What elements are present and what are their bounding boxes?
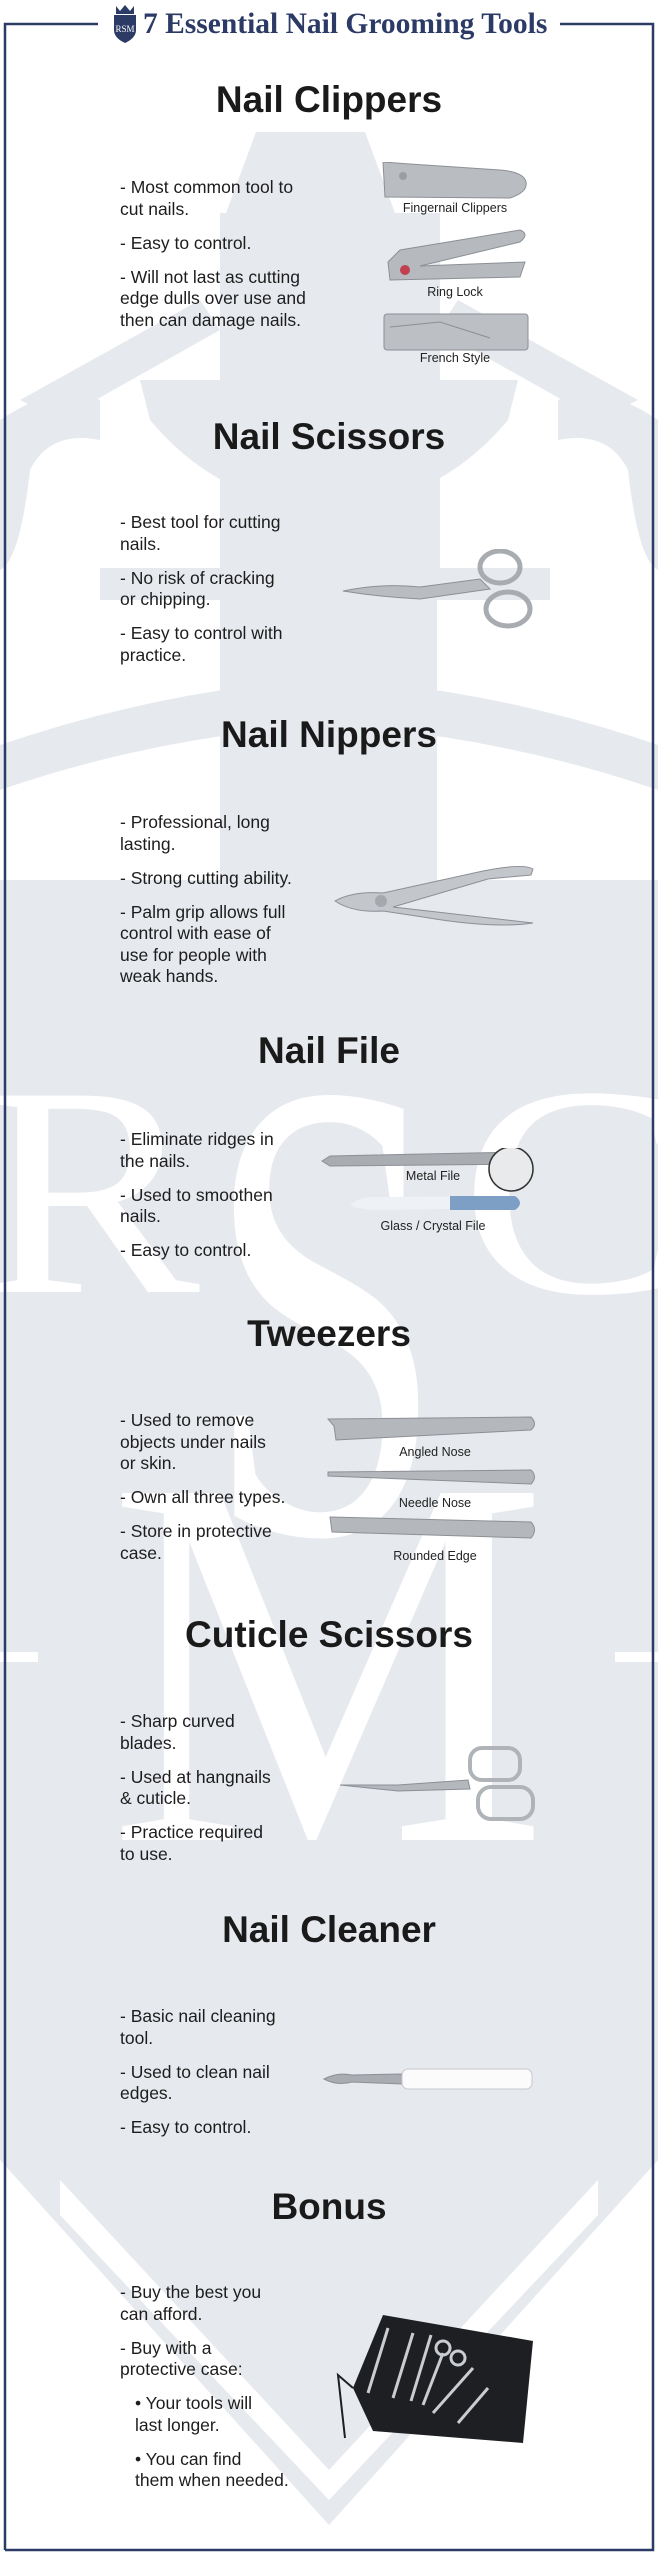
bullets: - Used to smoothen (120, 1184, 273, 1204)
image: nippers (334, 866, 534, 926)
bullets: nails. (120, 534, 161, 554)
bullets: last longer. (135, 2414, 220, 2434)
bullets: blades. (120, 1732, 176, 1752)
heading: Cuticle Scissors (185, 1614, 473, 1655)
bullets: - Eliminate ridges in (120, 1129, 274, 1149)
images: files (321, 1148, 534, 1210)
header: logo and title (114, 5, 547, 43)
bullets: • Your tools will (135, 2393, 252, 2413)
section: Nail Clippers: Ring Lock (427, 285, 483, 299)
heading: Bonus (271, 2186, 387, 2227)
section: Bonus (120, 2186, 533, 2490)
bullets: - Used to remove (120, 1410, 254, 1430)
section: Nail File: Glass / Crystal File (381, 1219, 485, 1233)
bullets: - Professional, long (120, 812, 270, 832)
bullets: - Easy to control. (120, 1240, 251, 1260)
bullets: - Buy with a (120, 2338, 211, 2358)
bullets: the nails. (120, 1150, 190, 1170)
bullets: - Buy the best you (120, 2282, 261, 2302)
bullets: - Easy to control with (120, 623, 282, 643)
bullets: then can damage nails. (120, 310, 301, 330)
heading: Nail Scissors (213, 416, 445, 457)
bullets: lasting. (120, 834, 175, 854)
section: Nail Cleaner (120, 1909, 532, 2137)
bullets: protective case: (120, 2359, 243, 2379)
bullets: nails. (120, 1206, 161, 1226)
bullets: - Own all three types. (120, 1487, 285, 1507)
icon: shield logo: RSM (115, 24, 135, 34)
bullets: objects under nails (120, 1432, 266, 1452)
section: Nail Clippers: French Style (420, 351, 490, 365)
bullets: case. (120, 1542, 162, 1562)
bullets: practice. (120, 644, 186, 664)
bullets (120, 2282, 289, 2490)
bullets: - Palm grip allows full (120, 902, 285, 922)
section: Tweezers: Needle Nose (399, 1496, 471, 1510)
bullets: tool. (120, 2028, 153, 2048)
bullets: to use. (120, 1844, 173, 1864)
section: Nail File: Metal File (406, 1169, 460, 1183)
bullets: - Practice required (120, 1822, 263, 1842)
bullets: - Store in protective (120, 1521, 272, 1541)
section: Nail Clippers: Fingernail Clippers (403, 201, 507, 215)
bullets: & cuticle. (120, 1788, 191, 1808)
heading: Nail Clippers (216, 79, 442, 120)
bullets (120, 1129, 274, 1260)
image: cuticle scissors (340, 1746, 535, 1821)
bullets: or skin. (120, 1453, 176, 1473)
bullets: use for people with (120, 944, 267, 964)
bullets (120, 1410, 285, 1562)
bullets: weak hands. (120, 966, 218, 986)
image: nail cleaner (323, 2068, 532, 2090)
section: Nail Scissors (120, 416, 532, 664)
bullets (120, 812, 292, 986)
section: Cuticle Scissors (120, 1614, 535, 1864)
section: Tweezers: Rounded Edge (393, 1549, 477, 1563)
bullets: - Used to clean nail (120, 2062, 270, 2082)
bullets: - Will not last as cutting (120, 266, 300, 286)
heading: Nail Cleaner (222, 1909, 436, 1950)
heading: Nail Nippers (221, 714, 437, 755)
bullets: edge dulls over use and (120, 288, 306, 308)
bullets: - Basic nail cleaning (120, 2006, 276, 2026)
bullets (120, 177, 306, 330)
bullets: - Used at hangnails (120, 1766, 271, 1786)
heading: Tweezers (247, 1313, 411, 1354)
image: scissors (342, 549, 532, 628)
bullets: - Easy to control. (120, 2117, 251, 2137)
bullets: - Strong cutting ability. (120, 868, 292, 888)
bullets (120, 512, 282, 664)
images: clippers (382, 162, 528, 350)
image: tool case (336, 2315, 533, 2443)
section: Tweezers: Angled Nose (399, 1445, 471, 1459)
bullets: them when needed. (135, 2470, 289, 2490)
bullets: cut nails. (120, 198, 189, 218)
bullets (120, 2006, 276, 2137)
section: Tweezers (120, 1313, 535, 1563)
bullets: • You can find (135, 2448, 241, 2468)
icon: shield logo (114, 5, 136, 43)
section: Nail Nippers (120, 714, 534, 986)
section: Nail File (120, 1030, 534, 1260)
background watermark: S (205, 944, 445, 1675)
bullets: - Easy to control. (120, 232, 251, 252)
bullets: - Most common tool to (120, 177, 293, 197)
bullets: or chipping. (120, 589, 210, 609)
bullets: edges. (120, 2083, 173, 2103)
heading: Nail File (258, 1030, 400, 1071)
background watermark: C (460, 1025, 658, 1357)
title: 7 Essential Nail Grooming Tools (143, 8, 547, 40)
bullets: - Best tool for cutting (120, 512, 280, 532)
bullets (120, 1711, 271, 1864)
bullets: can afford. (120, 2304, 202, 2324)
bullets: - No risk of cracking (120, 568, 275, 588)
bullets: - Sharp curved (120, 1711, 235, 1731)
bullets: control with ease of (120, 923, 271, 943)
background watermark: M (108, 1368, 548, 1955)
section: Nail Clippers (120, 79, 528, 365)
images: tweezers (327, 1416, 535, 1538)
